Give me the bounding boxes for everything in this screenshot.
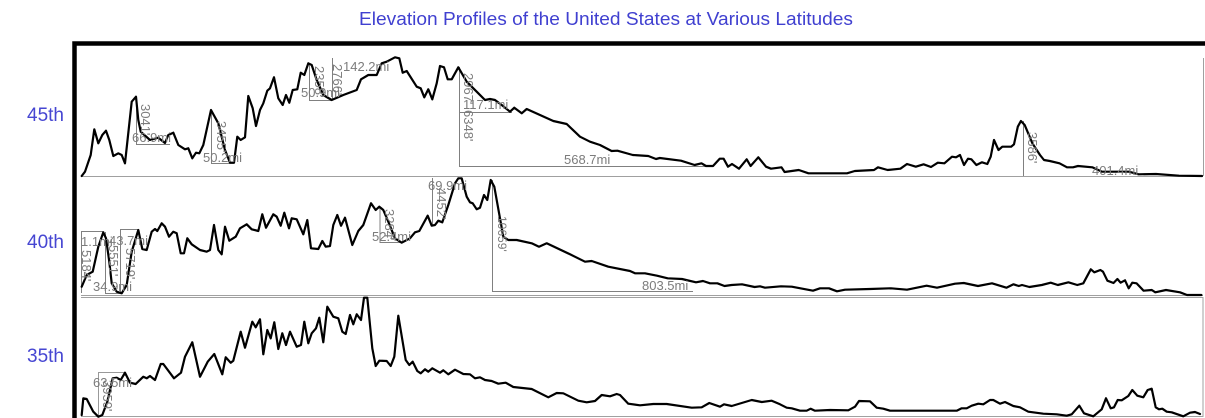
- annotation boxes 40th: [82, 178, 693, 294]
- label: 45th: 45th: [27, 105, 64, 126]
- annotation labels 40th: 5551': [106, 245, 121, 276]
- annotation labels 35th: 3959': [100, 380, 115, 411]
- annotation labels 45th: 401.4mi: [1092, 163, 1138, 178]
- annotation labels 40th: 1.1mi: [81, 234, 113, 249]
- annotation labels 40th: 4452': [434, 188, 449, 219]
- panel: 35th parallel: [81, 298, 1203, 417]
- annotation labels 40th: 34.9mi: [93, 279, 132, 294]
- annotation labels 45th: 2967': [461, 73, 476, 104]
- elevation profile 45th: [82, 57, 1202, 176]
- annotation labels 40th: 10659': [495, 216, 509, 252]
- label: 35th: 35th: [27, 346, 64, 367]
- annotation labels 45th: 3041': [138, 104, 153, 135]
- annotation labels 45th: 50.9mi: [301, 85, 340, 100]
- annotation labels 40th: [79, 178, 688, 294]
- annotation labels 40th: 52.4mi: [372, 229, 411, 244]
- title: Elevation Profiles of the United States at Various Latitudes: [359, 9, 853, 29]
- elevation profile 40th: [82, 178, 1201, 295]
- annotation labels 45th: [132, 59, 1138, 178]
- annotation labels 45th: 6348': [461, 110, 476, 141]
- annotation labels 40th: 43.7mi: [109, 233, 148, 248]
- elevation profile 35th: [82, 298, 1200, 417]
- annotation box 35th: [98, 372, 125, 416]
- annotation labels 45th: 568.7mi: [564, 152, 610, 167]
- annotation labels 45th: 66.9mi: [132, 130, 171, 145]
- annotation labels 35th: [93, 375, 132, 411]
- annotation labels 40th: 3284': [382, 209, 397, 240]
- annotation labels 40th: 5184': [79, 250, 94, 281]
- annotation labels 40th: 5719': [123, 248, 138, 279]
- annotation labels 35th: 63.5mi: [93, 375, 132, 390]
- annotation labels 45th: 50.2mi: [203, 150, 242, 165]
- annotation labels 45th: 2358': [312, 66, 327, 97]
- annotation labels 40th: 803.5mi: [642, 278, 688, 293]
- annotation labels 40th: 69.9mi: [428, 178, 467, 193]
- panel: 45th parallel: [81, 57, 1204, 178]
- annotation labels 45th: 142.2mi: [343, 59, 389, 74]
- annotation boxes 45th: [136, 58, 1024, 176]
- panel: 40th parallel: [79, 178, 1203, 296]
- annotation labels 45th: 2766': [330, 64, 345, 95]
- label: 40th: 40th: [27, 232, 64, 253]
- annotation labels 45th: 3455': [214, 121, 229, 152]
- annotation labels 45th: 117.1mi: [463, 97, 508, 112]
- annotation labels 45th: 3586': [1025, 132, 1040, 163]
